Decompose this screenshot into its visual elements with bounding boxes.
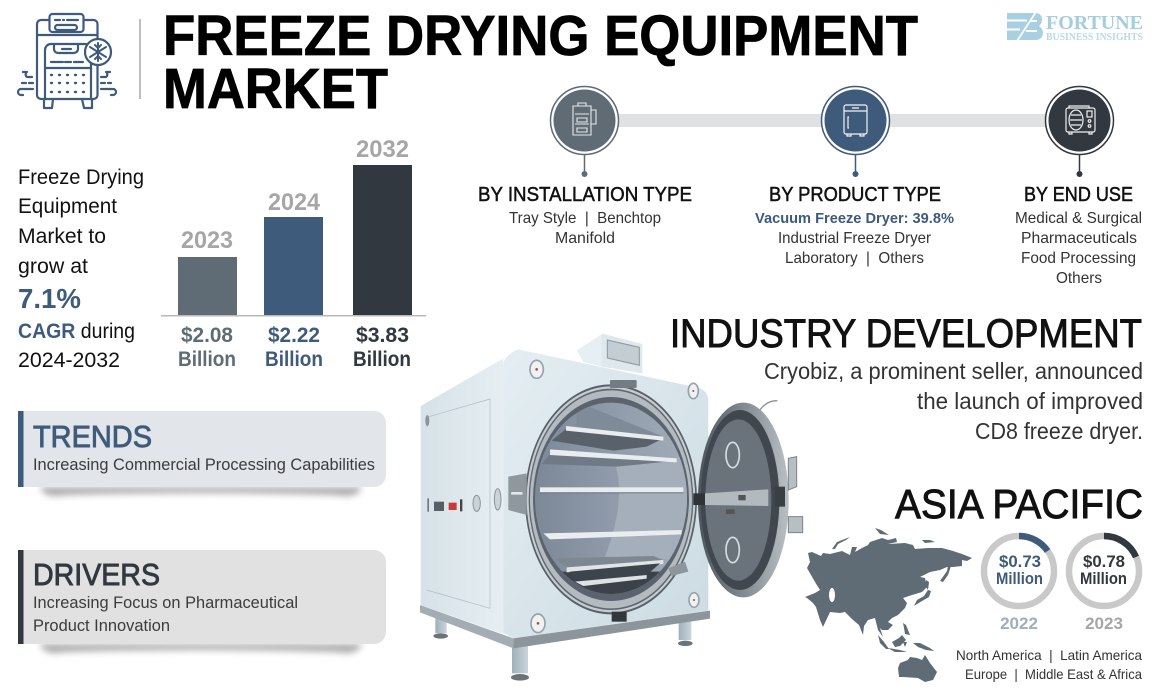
donut: 2023 bbox=[1069, 536, 1139, 633]
segment node: product type bbox=[822, 86, 890, 177]
panel: trends: Increasing Commercial Processing Capabilities bbox=[33, 455, 375, 474]
base bbox=[420, 605, 513, 648]
cabinet front bbox=[503, 349, 708, 638]
text block: growth summary: Equipment bbox=[18, 195, 117, 218]
segment node: end use bbox=[1046, 86, 1114, 177]
title: MARKET bbox=[163, 57, 388, 121]
logo: Fortune Business Insights: BUSINESS INSIGHTS bbox=[1046, 32, 1143, 43]
text block: growth summary: 7.1% bbox=[18, 283, 81, 314]
illustration: freeze dryer bbox=[420, 333, 803, 681]
segment text: by product type: BY PRODUCT TYPE bbox=[769, 184, 941, 206]
segment text: by installation type: Manifold bbox=[555, 230, 615, 247]
legs bbox=[433, 617, 693, 681]
cabinet side bbox=[421, 358, 503, 634]
text block: other regions bbox=[956, 647, 1142, 682]
logo: Fortune Business Insights bbox=[1007, 12, 1143, 43]
text block: growth summary: CAGR during bbox=[18, 320, 135, 343]
shelves bbox=[540, 426, 683, 586]
text block: industry development: the launch of improved bbox=[917, 388, 1143, 414]
map: asia pacific bbox=[805, 528, 972, 682]
segment text: by end use bbox=[1015, 184, 1142, 287]
bar 2023: $2.08 bbox=[181, 324, 233, 347]
logo: Fortune Business Insights: FORTUNE bbox=[1046, 12, 1143, 34]
bar 2024 bbox=[264, 189, 323, 371]
text block: growth summary: Market to bbox=[18, 225, 106, 248]
text block: industry development bbox=[764, 358, 1143, 444]
bar 2023: 2023 bbox=[181, 227, 233, 254]
donut: 2022: 2022 bbox=[1000, 614, 1038, 633]
text block: other regions: North America | Latin America bbox=[956, 647, 1142, 663]
bar 2023 bbox=[178, 227, 237, 371]
donut: 2023: 2023 bbox=[1085, 614, 1123, 633]
segment text: by product type: Laboratory | Others bbox=[785, 250, 924, 267]
door opening bbox=[508, 380, 697, 622]
open door bbox=[693, 401, 803, 597]
control panel bbox=[425, 415, 501, 512]
panel: drivers: DRIVERS bbox=[33, 557, 160, 592]
donut: 2023: Million bbox=[1080, 570, 1127, 588]
segment text: by end use: Others bbox=[1056, 270, 1102, 287]
text block: growth summary: Freeze Drying bbox=[18, 166, 144, 189]
panel: drivers: Increasing Focus on Pharmaceutical bbox=[33, 593, 298, 612]
bar 2032: Billion bbox=[353, 348, 411, 371]
segment text: by product type bbox=[755, 184, 954, 267]
segment text: by end use: Pharmaceuticals bbox=[1021, 230, 1137, 247]
text block: industry development: CD8 freeze dryer. bbox=[975, 418, 1143, 444]
text block: other regions: Europe | Middle East & Africa bbox=[965, 666, 1142, 682]
segment text: by end use: Medical & Surgical bbox=[1015, 210, 1142, 227]
connector bar bbox=[610, 114, 1055, 127]
bar 2024: 2024 bbox=[268, 189, 321, 216]
segment text: by end use: Food Processing bbox=[1021, 250, 1136, 267]
bar 2023: Billion bbox=[178, 348, 236, 371]
panel: drivers: Product Innovation bbox=[33, 616, 170, 635]
segment node: installation type bbox=[550, 86, 618, 177]
segment text: by product type: Vacuum Freeze Dryer: 39.8% bbox=[755, 210, 954, 227]
donut: 2022: Million bbox=[996, 570, 1043, 588]
divider bbox=[139, 19, 141, 99]
panel: trends: TRENDS bbox=[33, 419, 152, 454]
bar 2032: 2032 bbox=[356, 136, 409, 163]
donut: 2022: $0.73 bbox=[999, 553, 1041, 571]
text block: growth summary bbox=[18, 166, 144, 372]
bar 2024: Billion bbox=[265, 348, 323, 371]
title: FREEZE DRYING EQUIPMENT bbox=[163, 4, 918, 68]
bar 2024: $2.22 bbox=[268, 324, 320, 347]
segment text: by end use: BY END USE bbox=[1024, 184, 1133, 206]
text block: growth summary: 2024-2032 bbox=[18, 349, 120, 372]
bar 2032 bbox=[353, 136, 412, 371]
segment text: by installation type: BY INSTALLATION TYPE bbox=[478, 184, 692, 206]
donut: 2023: $0.78 bbox=[1083, 553, 1125, 571]
text block: industry development: Cryobiz, a prominent seller, announced bbox=[764, 358, 1143, 384]
title bbox=[163, 4, 918, 121]
gauges bbox=[530, 360, 699, 633]
segment text: by installation type bbox=[478, 184, 692, 247]
donut: 2022 bbox=[984, 536, 1054, 633]
panel: drivers bbox=[18, 550, 386, 653]
segment text: by product type: Industrial Freeze Dryer bbox=[778, 230, 932, 247]
bar chart: market size bbox=[161, 136, 426, 371]
top box bbox=[577, 333, 642, 373]
icon: freeze dryer machine bbox=[18, 14, 116, 108]
heading: asia pacific: ASIA PACIFIC bbox=[895, 481, 1143, 527]
text block: growth summary: grow at bbox=[18, 255, 88, 278]
panel: trends bbox=[18, 411, 386, 496]
segment text: by installation type: Tray Style | Benchtop bbox=[509, 210, 661, 227]
bar 2032: $3.83 bbox=[356, 324, 409, 347]
